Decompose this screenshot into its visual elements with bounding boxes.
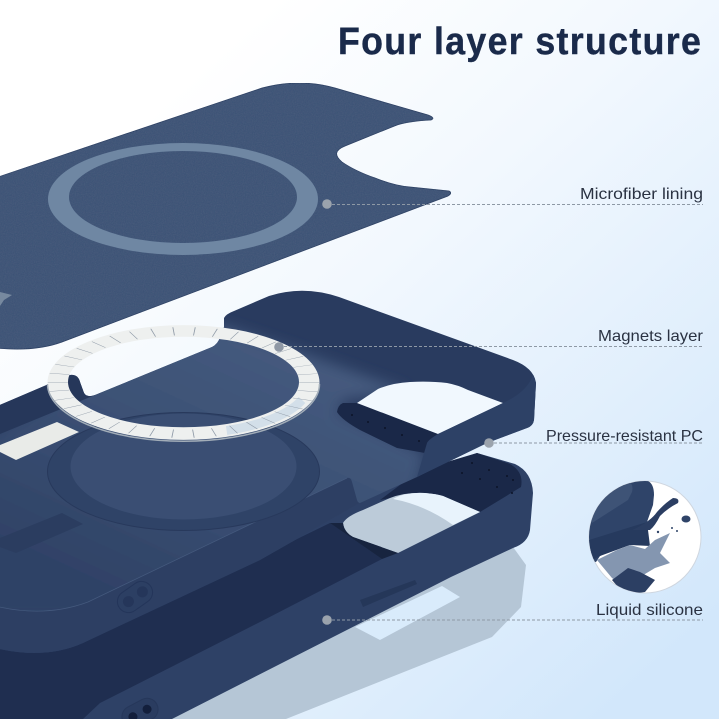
- phone case layers: [0, 291, 536, 719]
- silicone splash: [597, 533, 670, 584]
- title: Four layer structure: [338, 20, 701, 62]
- label strip: [0, 422, 79, 460]
- window inner side: [330, 523, 398, 559]
- magnet circle recess: [48, 412, 320, 530]
- label: magnets layer: [274, 328, 704, 352]
- splash droplet: [682, 516, 690, 522]
- top splash stream: [646, 498, 678, 530]
- case lower shade: [589, 522, 650, 560]
- cast shadow of case: [165, 547, 526, 719]
- label: microfiber lining: Microfiber lining: [580, 186, 703, 203]
- rectangle recess: [0, 513, 83, 553]
- PC window side: [337, 403, 438, 453]
- small mark: [0, 292, 12, 306]
- PC back wall: [0, 291, 536, 653]
- magnet circle pad: [70, 414, 296, 520]
- PC outer corner wall: [417, 375, 536, 477]
- label: pressure-resistant PC: Pressure-resistant PC: [546, 428, 703, 445]
- magnets ring: [47, 325, 320, 441]
- inner dots: [461, 462, 514, 494]
- PC left wall band: [0, 375, 95, 436]
- small droplets: [671, 527, 673, 529]
- side camera pill: [113, 577, 157, 617]
- side button: [360, 580, 417, 607]
- label: pressure-resistant PC: [484, 428, 703, 448]
- ring edge: [48, 384, 320, 441]
- PC window opening: [357, 382, 503, 434]
- ring segment lines: [58, 331, 309, 434]
- layer: liquid silicone: [0, 453, 533, 719]
- case corner: [585, 481, 654, 562]
- light patch in shadow: [355, 586, 460, 640]
- dark splash body: [612, 568, 655, 595]
- camera window: [343, 493, 480, 553]
- PC floor: [0, 323, 424, 588]
- icon: silicone splash badge: [585, 481, 701, 595]
- label: liquid silicone: Liquid silicone: [596, 602, 703, 619]
- camera cutout interior: [380, 453, 522, 512]
- label: magnets layer: Magnets layer: [598, 328, 704, 345]
- label: liquid silicone: [322, 602, 703, 625]
- ring lower shade: [227, 400, 302, 430]
- silicone outer body: [0, 453, 533, 719]
- case corner inner: [592, 483, 632, 523]
- layer: pressure-resistant PC: [0, 291, 536, 653]
- PC rim edge line: [0, 478, 347, 611]
- lower camera pill: [118, 694, 162, 719]
- window top glow: [393, 493, 480, 525]
- lining magnet ring: [48, 143, 318, 255]
- label: microfiber lining: [322, 186, 703, 209]
- silicone inner dark band: [0, 523, 382, 719]
- lining sheet: [0, 83, 451, 349]
- PC window dots: [351, 414, 420, 442]
- PC front rim: [0, 478, 363, 653]
- layer: microfiber lining: [0, 83, 451, 349]
